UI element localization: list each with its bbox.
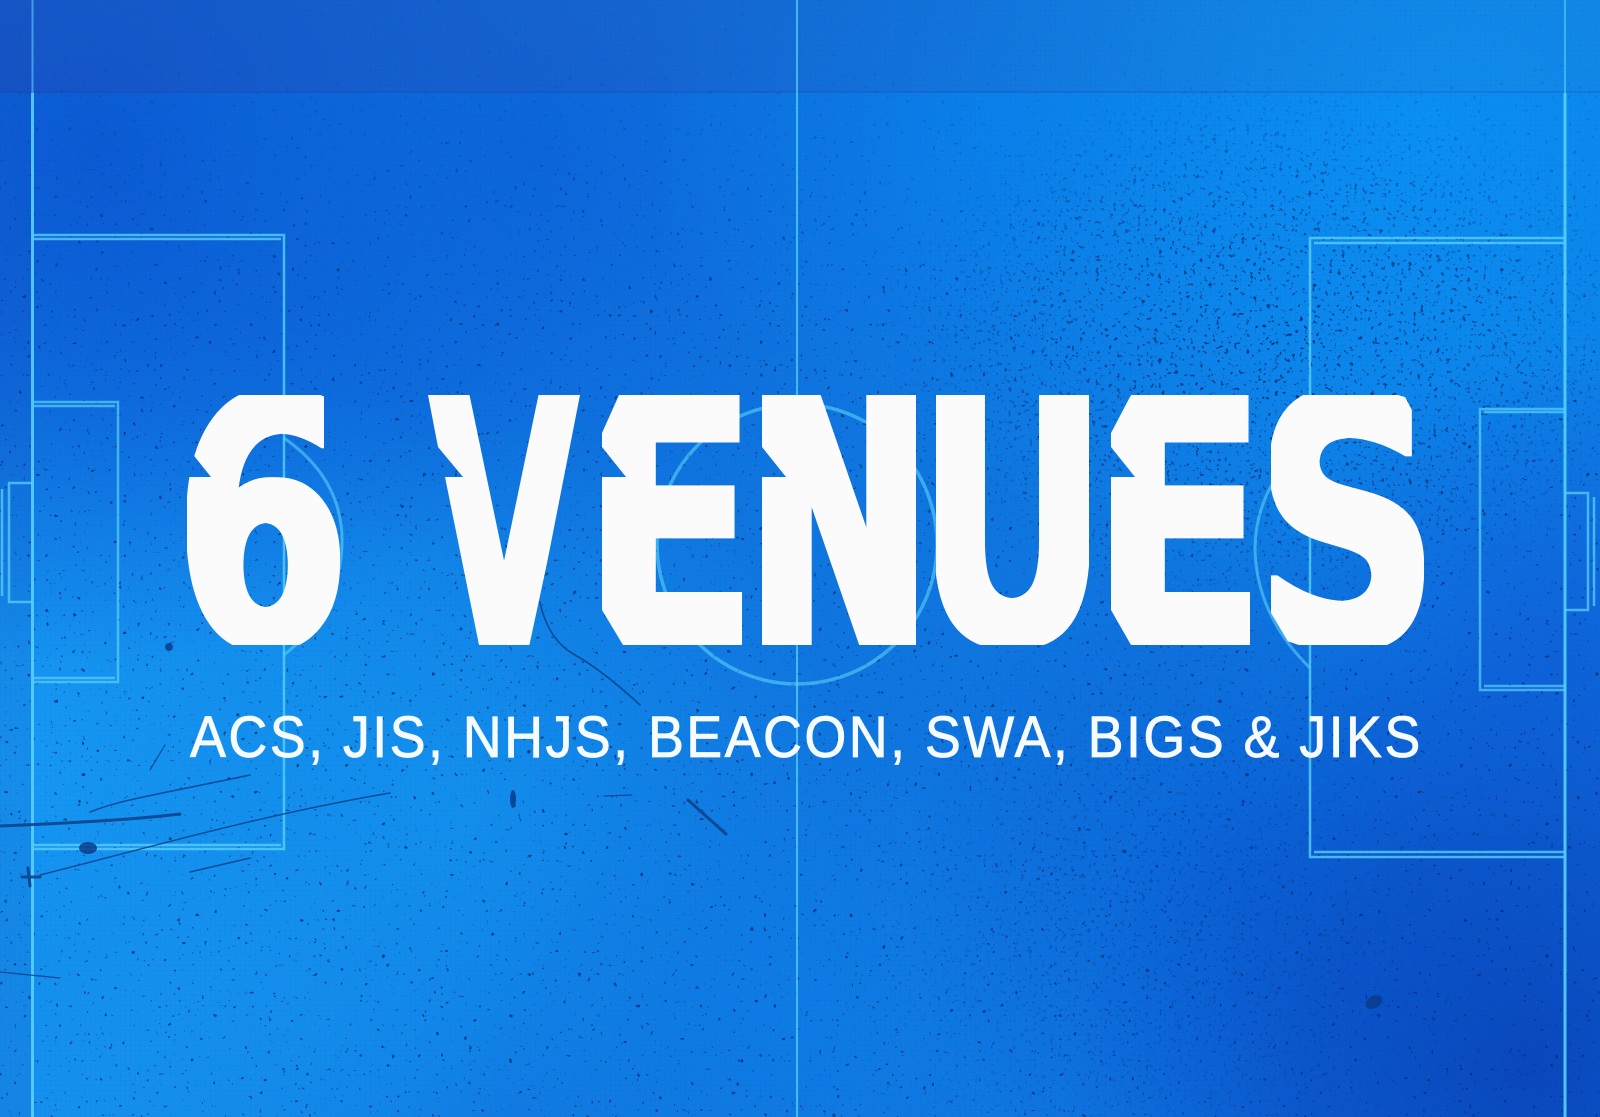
title letter V: V (427, 322, 583, 725)
left penalty arc (284, 438, 342, 655)
title letter 6: 6 (173, 324, 351, 727)
left touchline lower (31, 93, 34, 1117)
title: 6 VENUES (187, 395, 1424, 645)
stain blots (79, 643, 1385, 1012)
right touchline lower (1564, 93, 1566, 1117)
right penalty box (1310, 238, 1565, 857)
halfway line (796, 0, 798, 1117)
title letter E second: E (1088, 324, 1268, 725)
title letter E: E (579, 324, 759, 725)
right penalty arc (1255, 440, 1310, 668)
right goal (1565, 493, 1594, 610)
right six-yard box (1480, 409, 1565, 690)
title letter N: N (745, 323, 933, 725)
left goal (2, 483, 32, 602)
title letter U: U (915, 323, 1109, 724)
right touchline upper (1564, 0, 1566, 93)
left six-yard box (34, 402, 118, 682)
title letter S: S (1254, 325, 1440, 726)
left penalty box (34, 235, 284, 849)
centre circle (657, 404, 937, 684)
left touchline upper (32, 0, 34, 93)
subtitle: venue list: ACS, JIS, NHJS, BEACON, SWA, BIGS & JIKS (190, 704, 1420, 769)
scratches (0, 602, 726, 978)
